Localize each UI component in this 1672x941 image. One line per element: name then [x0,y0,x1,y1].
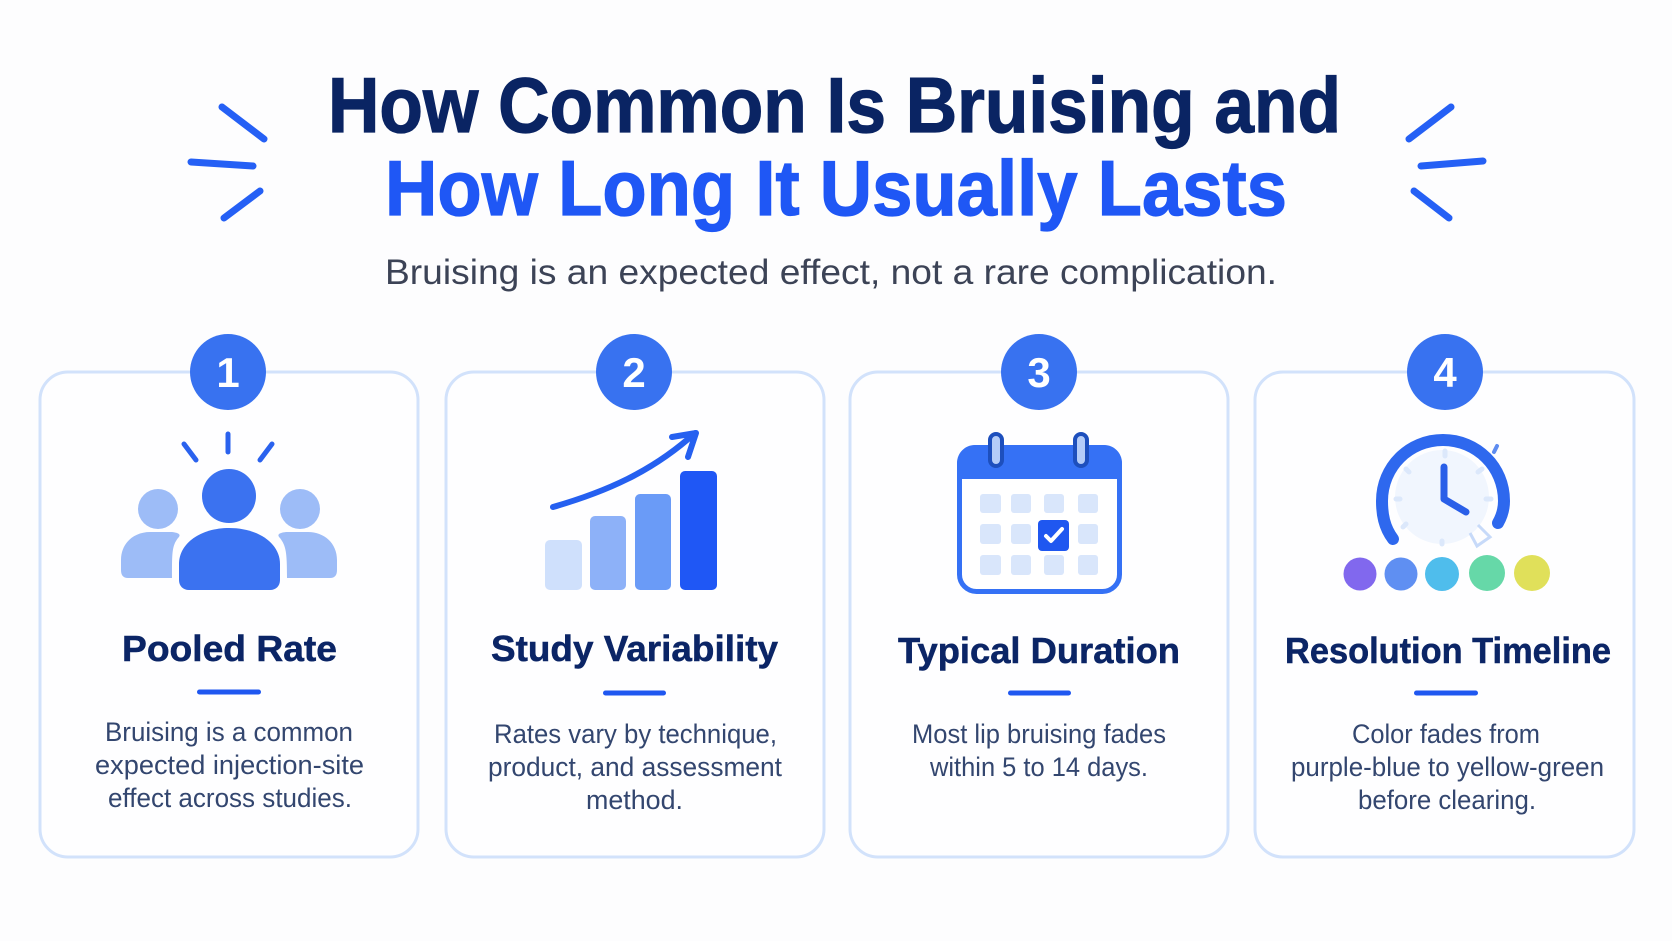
divider [197,690,261,694]
number badge 2 [596,334,672,410]
panel: typical duration [850,334,1228,857]
body text: before clearing. [1358,785,1536,815]
body text [95,717,364,813]
title [328,61,1341,232]
icon: clock with fading color dots [1344,440,1550,591]
number badge 1: 1 [216,349,240,396]
icon: left burst lines [191,107,264,218]
body text: product, and assessment [488,752,782,782]
heading: pooled rate: Pooled Rate [122,628,337,669]
body text: Rates vary by technique, [494,719,777,749]
body text: Bruising is a common [105,717,353,747]
heading: study variability: Study Variability [491,628,778,669]
body text: purple-blue to yellow-green [1291,752,1604,782]
subtitle: Bruising is an expected effect, not a rare complication. [385,253,1277,292]
title: How Common Is Bruising and [328,61,1341,149]
number badge 3: 3 [1027,349,1051,396]
icon: people group [121,434,337,590]
body text: method. [586,785,683,815]
body text: Most lip bruising fades [912,719,1166,749]
number badge 4: 4 [1433,349,1457,396]
icon: right burst lines [1409,107,1483,218]
panel: pooled rate [40,334,418,857]
number badge 2: 2 [622,349,646,396]
panel: resolution timeline [1255,334,1634,857]
body text: expected injection-site [95,750,364,780]
divider [603,690,666,696]
number badge 3 [1001,334,1077,410]
body text [912,719,1166,782]
body text: Color fades from [1352,719,1540,749]
body text [1291,719,1604,815]
heading: resolution timeline: Resolution Timeline [1285,630,1611,671]
number badge 4 [1407,334,1483,410]
body text: within 5 to 14 days. [929,752,1148,782]
icon: rising bar chart [545,433,717,590]
icon: calendar with check [957,434,1122,592]
heading: typical duration: Typical Duration [898,630,1180,671]
divider [1414,690,1478,696]
number badge 1 [190,334,266,410]
body text: effect across studies. [108,783,352,813]
title: How Long It Usually Lasts [385,144,1287,232]
body text [488,719,782,815]
panel: study variability [446,334,824,857]
divider [1008,690,1071,696]
